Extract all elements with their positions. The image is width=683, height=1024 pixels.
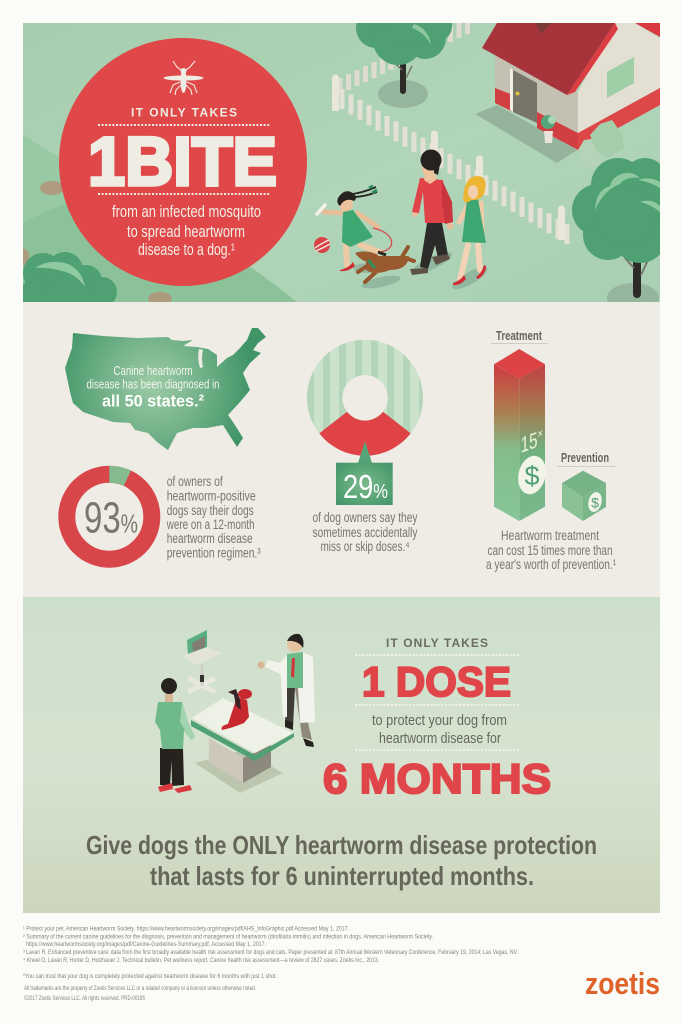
text: to protect your dog: heartworm disease for bbox=[379, 730, 501, 747]
text: skip doses: sometimes accidentally bbox=[312, 525, 418, 540]
chart: prevention cube bbox=[562, 471, 606, 521]
footnotes: ⁴ Kneel O, Lavan R, Horter D, Holzhauer J. Technical bulletin. Pet wellness report. Canine health risk assessment—a review of 2827 cases. Zoetis Inc., 2013. bbox=[23, 957, 379, 964]
rocks bbox=[19, 181, 172, 306]
text: from an infected mosquito: disease to a dog.¹ bbox=[138, 241, 235, 259]
heading: 6 months: 6 MONTHS bbox=[323, 755, 551, 802]
dog on table bbox=[222, 689, 252, 730]
tree: right bbox=[572, 158, 660, 302]
chart: 93% donut bbox=[67, 474, 152, 559]
girl bbox=[324, 186, 380, 271]
back fence bbox=[340, 18, 468, 94]
text: all 50 states: disease has been diagnosed in bbox=[86, 378, 220, 392]
text: give dogs the only bbox=[86, 830, 597, 891]
footnotes: ©2017 Zoetis Services LLC. All rights reserved. PRD-00195 bbox=[24, 994, 145, 1002]
divider: dots 1 bbox=[355, 654, 520, 656]
divider: dots 2 bbox=[355, 704, 520, 706]
footnotes bbox=[23, 926, 518, 1002]
house shadow bbox=[475, 105, 577, 163]
dog bbox=[355, 247, 414, 282]
text: skip doses: of dog owners say they bbox=[312, 510, 418, 525]
text: to protect your dog bbox=[372, 712, 507, 747]
ultrasound machine bbox=[182, 630, 222, 692]
text: to protect your dog: to protect your dog from bbox=[372, 712, 507, 729]
bushes bbox=[578, 120, 624, 158]
panel: one dose bbox=[23, 597, 660, 913]
logo: zoetis: zoetis bbox=[585, 966, 660, 1001]
footnotes: *You can trust that your dog is completely protected against heartworm disease for 6 months with just 1 shot. bbox=[23, 973, 277, 980]
divider: dots 3 bbox=[355, 749, 520, 751]
man bbox=[410, 150, 454, 275]
front fence bbox=[342, 89, 567, 244]
text: owners on regimen: heartworm disease bbox=[167, 531, 253, 546]
plant pot bbox=[541, 115, 556, 143]
heading: it only takes: IT ONLY TAKES bbox=[131, 106, 237, 120]
leash bbox=[373, 228, 392, 252]
owner bbox=[155, 678, 195, 793]
text: from an infected mosquito bbox=[112, 203, 261, 259]
text: treatment cost: can cost 15 times more than bbox=[488, 543, 612, 558]
fence posts bbox=[332, 74, 565, 240]
text: owners on regimen: dogs say their dogs bbox=[167, 503, 254, 518]
heading: 1 bite: 1BITE bbox=[88, 123, 277, 200]
text: all 50 states: Canine heartworm bbox=[114, 364, 192, 378]
callout: 29%: 29% bbox=[343, 468, 388, 505]
map: United States bbox=[65, 328, 266, 450]
text: owners on regimen: prevention regimen.³ bbox=[167, 546, 261, 560]
divider: dots top bbox=[98, 124, 270, 126]
panel: bite circle bbox=[59, 38, 307, 286]
text: treatment cost: Heartworm treatment bbox=[501, 528, 599, 543]
table base bbox=[209, 738, 243, 783]
heading: 1 dose: 1 DOSE bbox=[362, 658, 511, 705]
text: owners on regimen: heartworm-positive bbox=[167, 488, 256, 504]
text: owners on regimen: were on a 12-month bbox=[166, 517, 255, 532]
label: 15x: × bbox=[538, 427, 543, 442]
label: treatment: Treatment bbox=[496, 329, 543, 343]
text: owners on regimen bbox=[166, 474, 261, 560]
text: give dogs the only: that lasts for 6 uninterrupted months. bbox=[150, 861, 534, 891]
heading: it only takes: IT ONLY TAKES bbox=[386, 636, 488, 650]
footnotes: ³ Lavan R. Enhanced preventive care: data from the first broadly available health risk assessment for dogs and cats. Paper presented at: 87th Annual Western Veterinary Conference; February 19, 2014; Las Vegas, NV. bbox=[23, 949, 518, 956]
table top bbox=[191, 720, 294, 761]
chart: treatment bar bbox=[494, 349, 550, 521]
text: treatment cost bbox=[486, 528, 616, 572]
text: skip doses bbox=[312, 510, 418, 554]
figure shadows bbox=[353, 252, 488, 290]
chart: 29% donut bbox=[307, 340, 423, 505]
icon: dollar coin: $ bbox=[524, 461, 540, 491]
icon: mosquito bbox=[164, 61, 204, 95]
text: all 50 states bbox=[86, 364, 220, 410]
woman bbox=[453, 176, 486, 285]
ball bbox=[314, 237, 330, 253]
text: treatment cost: a year's worth of prevention.¹ bbox=[486, 557, 616, 572]
callout: 29% bbox=[336, 441, 393, 505]
house bbox=[482, 23, 660, 150]
bone bbox=[317, 205, 325, 214]
number: 93%: 93% bbox=[84, 494, 138, 542]
text: from an infected mosquito: from an infected mosquito bbox=[112, 203, 261, 221]
text: all 50 states: all 50 states.² bbox=[102, 392, 204, 410]
divider: dots bottom bbox=[98, 193, 270, 195]
veterinarian bbox=[258, 634, 315, 747]
text: from an infected mosquito: to spread heartworm bbox=[127, 223, 245, 241]
panel: statistics bbox=[23, 302, 660, 597]
text: owners on regimen: of owners of bbox=[167, 474, 223, 489]
text: skip doses: miss or skip doses.⁴ bbox=[320, 539, 410, 554]
footnotes: All trademarks are the property of Zoetis Services LLC or a related company or a licensor unless otherwise noted. bbox=[24, 985, 256, 992]
footnotes: ² Summary of the current canine guidelines for the diagnosis, prevention and management of heartworm (dirofilaria immitis) and infection in dogs. American Heartworm Society. bbox=[23, 934, 433, 940]
panel: hero scene bbox=[23, 23, 660, 302]
tree: top bbox=[356, 23, 452, 108]
label: 15x: 15 bbox=[520, 427, 538, 459]
tree: bottom left bbox=[23, 252, 117, 302]
illustration: vet exam bbox=[155, 630, 315, 793]
label: prevention: Prevention bbox=[561, 451, 609, 465]
icon: small dollar coin: $ bbox=[591, 494, 599, 510]
footnotes: https://www.heartwormsociety.org/images/pdf/Canine-Guidelines-Summary.pdf. Accessed May 1, 2017. bbox=[26, 941, 266, 948]
table shadow bbox=[195, 750, 283, 793]
icon: dollar coin bbox=[514, 453, 550, 497]
footnotes: ¹ Protect your pet. American Heartworm Society. https://www.heartwormsociety.org/images/pdf/AHS_InfoGraphic.pdf Accessed May 1, 2017. bbox=[23, 926, 349, 932]
